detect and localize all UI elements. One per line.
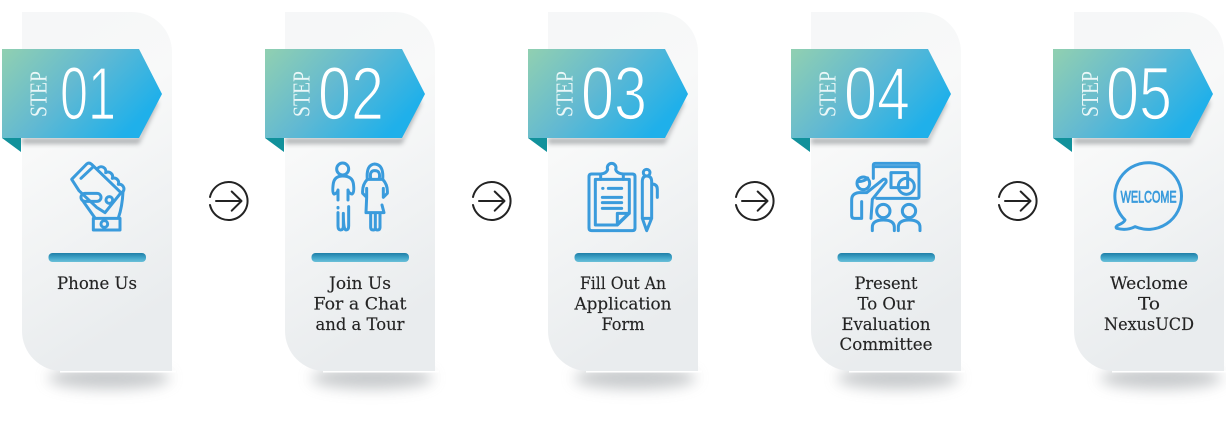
label: Evaluation <box>842 315 931 335</box>
step ribbon: 01 <box>60 52 116 136</box>
icon: welcome speech bubble <box>1115 163 1182 229</box>
panel: step 5 <box>1053 12 1226 389</box>
step ribbon <box>791 49 951 152</box>
panel: step 4 <box>791 12 965 389</box>
icon: welcome speech bubble: WELCOME <box>1121 188 1177 207</box>
panel: step 3 <box>528 12 702 389</box>
label: Application <box>574 294 672 314</box>
label: Fill Out An <box>580 274 666 294</box>
arrow 3 <box>736 182 774 220</box>
step ribbon: STEP <box>816 71 842 117</box>
label: NexusUCD <box>1104 315 1194 335</box>
label: Join Us <box>327 274 391 294</box>
step ribbon: STEP <box>290 71 316 117</box>
icon: hand holding phone <box>72 163 124 230</box>
divider bar <box>574 253 672 262</box>
divider bar <box>838 253 935 262</box>
label: For a Chat <box>314 294 407 314</box>
card background <box>22 12 176 389</box>
divider bar <box>312 253 409 262</box>
arrow 1 <box>210 182 248 220</box>
label: Weclome <box>1110 274 1188 294</box>
step ribbon <box>1053 49 1213 152</box>
step ribbon: 02 <box>318 52 384 136</box>
panel: step 1 <box>2 12 176 389</box>
panel: step 2 <box>265 12 439 389</box>
icon: clipboard and pen <box>589 163 657 231</box>
icon: two people <box>333 163 387 230</box>
step ribbon: 04 <box>844 52 910 136</box>
step ribbon: 05 <box>1106 52 1172 136</box>
arrow 4 <box>999 182 1037 220</box>
divider bar <box>48 253 146 262</box>
divider bar <box>1100 253 1198 262</box>
label <box>314 274 407 335</box>
card background <box>548 12 702 389</box>
step ribbon <box>265 49 425 152</box>
step ribbon: 03 <box>581 52 647 136</box>
label <box>840 274 932 355</box>
label: Form <box>602 315 644 335</box>
label <box>574 274 672 335</box>
card background <box>1074 12 1226 389</box>
label <box>1104 274 1194 335</box>
label: Present <box>854 274 918 294</box>
label: Phone Us <box>57 274 137 294</box>
label: To Our <box>858 294 915 314</box>
label: and a Tour <box>316 315 405 335</box>
arrow 2 <box>473 182 511 220</box>
step ribbon: STEP <box>552 71 578 117</box>
icon: presenter and audience <box>852 163 920 231</box>
label: Committee <box>840 335 932 355</box>
step ribbon <box>2 49 162 152</box>
card background <box>285 12 439 389</box>
card background <box>811 12 965 389</box>
step ribbon: STEP <box>26 71 52 117</box>
label: To <box>1138 294 1160 314</box>
step ribbon: STEP <box>1078 71 1104 117</box>
step ribbon <box>528 49 688 152</box>
